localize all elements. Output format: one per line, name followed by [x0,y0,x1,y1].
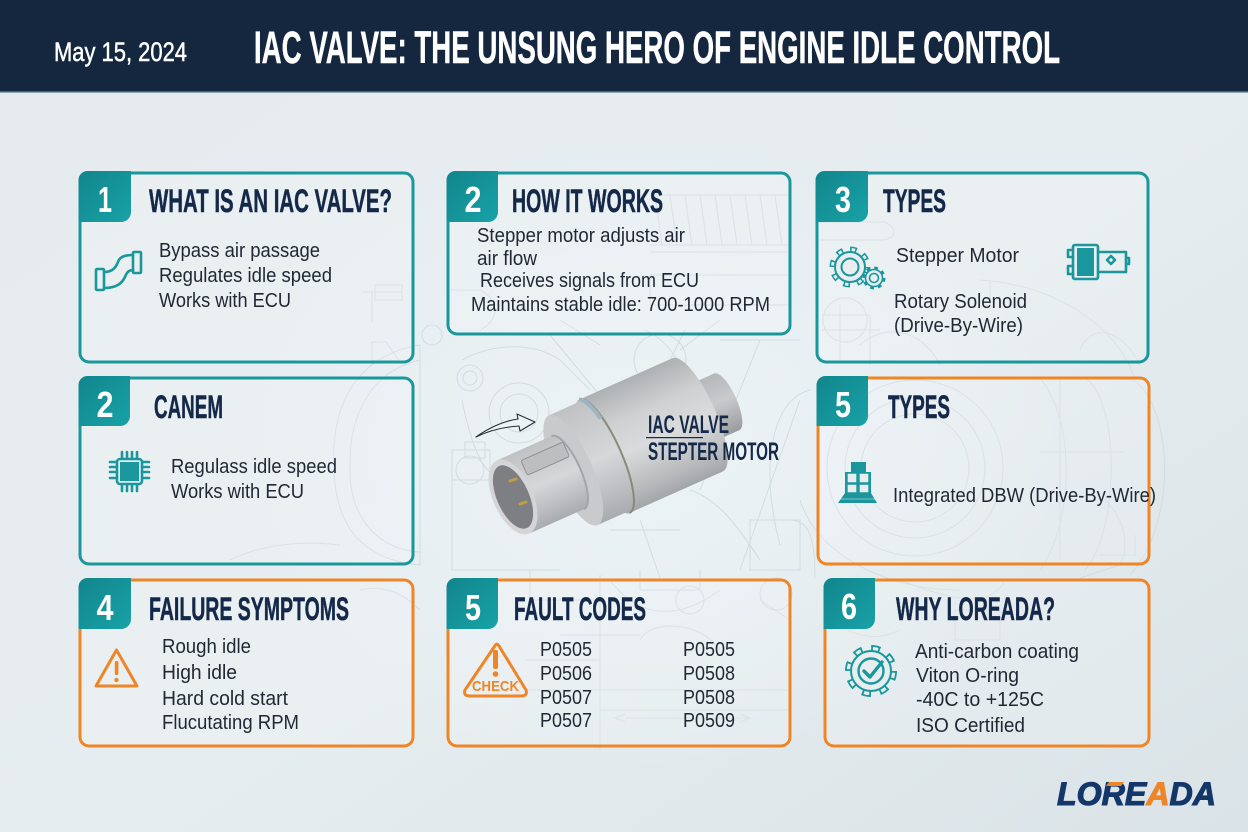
badge 4 [78,578,131,629]
text: steps [471,225,770,316]
text: steps: Stepper motor adjusts air [477,225,685,247]
connector pins [510,479,526,504]
text: symptoms: Hard cold start [162,688,288,710]
icon: gear check [848,648,894,694]
badge 1: 1 [98,179,112,220]
central product image: IAC valve [470,341,779,562]
text: integrated DBW: Integrated DBW (Drive-By-Wire) [893,485,1156,507]
badge 1 [78,171,131,222]
text: benefits: -40C to +125C [916,689,1044,711]
text: facts: Regulates idle speed [159,265,332,287]
text: codes right column: P0508 [683,687,735,709]
text: codes right column [683,639,735,732]
text: codes right column: P0505 [683,639,735,661]
icon: motor [1068,245,1129,279]
panel: why loreada [824,578,1149,746]
text: rotary solenoid: Rotary Solenoid [894,291,1027,313]
text: steps: Receives signals from ECU [480,270,699,292]
text: codes right column: P0508 [683,663,735,685]
text: facts: Works with ECU [171,481,304,503]
valve label: IAC VALVE [648,411,729,439]
logo: LOREADA [1057,776,1216,812]
badge 5 [816,376,868,426]
badge 2: 2 [96,384,114,425]
engine blueprint watermark [230,195,1165,750]
text: benefits [915,641,1079,737]
text: benefits: Viton O-ring [916,665,1019,687]
panel: types [816,171,1148,362]
badge 6 [824,578,875,629]
icon: gears [832,250,884,288]
text: rotary solenoid [894,291,1027,337]
text: symptoms: Flucutating RPM [162,712,299,734]
badge 5: 5 [465,587,481,628]
text: facts [171,456,337,503]
icon: warning triangle [96,650,137,686]
text: symptoms [162,636,299,734]
heading: FAULT CODES [514,591,646,627]
icon: check warning: CHECK [472,678,519,695]
heading: TYPES [883,183,946,219]
text: symptoms: High idle [162,662,237,684]
heading: HOW IT WORKS [512,183,663,219]
badge 4: 4 [96,587,114,628]
icon: check warning [465,644,526,696]
valve label: STEPTER MOTOR [648,438,779,466]
text: codes left column: P0506 [540,663,592,685]
badge 2 [78,376,130,426]
icon: chip [110,452,149,491]
badge 6: 6 [841,586,857,627]
heading: TYPES [888,389,950,425]
text: facts [159,240,332,312]
text: codes left column [540,639,592,732]
text: steps: Maintains stable idle: 700-1000 RPM [471,294,770,316]
badge 3: 3 [835,179,851,220]
text: facts: Bypass air passage [159,240,320,262]
badge 2 [446,171,498,222]
text: rotary solenoid: (Drive-By-Wire) [894,315,1023,337]
icon: throttle body [838,462,877,503]
header bar [0,0,1248,93]
valve label [646,411,779,466]
text: stepper motor: Stepper Motor [896,245,1019,267]
icon: bypass pipe [96,252,141,290]
text: codes left column: P0507 [540,710,592,732]
panel: what is an IAC valve [78,171,413,362]
panel: how it works [446,171,790,334]
badge 2: 2 [464,179,482,220]
text: codes left column: P0507 [540,687,592,709]
valve body [470,341,761,562]
text: facts: Works with ECU [159,290,291,312]
panel: canem [78,376,413,564]
badge 5 [446,578,498,629]
date: May 15, 2024 [54,37,187,67]
text: steps: air flow [477,248,538,270]
text: benefits: Anti-carbon coating [915,641,1079,663]
badge 3 [816,171,868,222]
panel: fault codes [446,578,790,746]
text: facts: Regulass idle speed [171,456,337,478]
heading: WHY LOREADA? [896,591,1055,627]
heading: CANEM [154,389,223,425]
text: symptoms: Rough idle [162,636,251,658]
text: benefits: ISO Certified [916,715,1025,737]
heading: FAILURE SYMPTOMS [149,591,349,627]
heading: WHAT IS AN IAC VALVE? [149,183,392,219]
arrow [476,414,535,437]
panel: types integrated [816,376,1156,564]
panel: failure symptoms [78,578,413,746]
text: codes right column: P0509 [683,710,735,732]
text: codes left column: P0505 [540,639,592,661]
badge 5: 5 [835,384,851,425]
